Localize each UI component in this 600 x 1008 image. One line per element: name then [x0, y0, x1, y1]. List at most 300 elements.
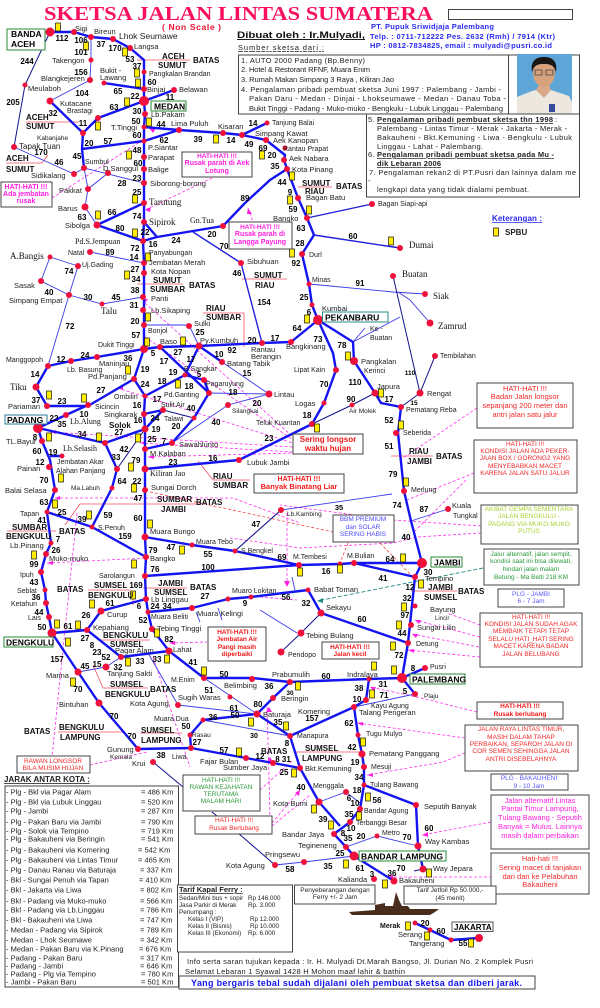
province border labels: SUMUT	[6, 165, 35, 174]
province border labels: BATAS	[193, 56, 220, 65]
town names: Kiliran Jao	[150, 469, 185, 478]
distance numbers: 34	[78, 430, 87, 439]
distance numbers: 30	[133, 107, 142, 116]
distance numbers: 25	[133, 188, 142, 197]
distance numbers: 25	[300, 293, 309, 302]
distance numbers: 46	[233, 269, 242, 278]
distance numbers: 34	[355, 773, 364, 782]
town names: Sibolga	[65, 221, 91, 230]
town names: Bayung	[430, 605, 455, 614]
panel: distance table: = 786 Km	[140, 906, 172, 914]
town names: Siborong-borong	[150, 179, 206, 188]
distance numbers: 35	[324, 862, 333, 871]
panel: distance table: = 566 Km	[140, 896, 172, 906]
town names: Mariapura	[297, 733, 329, 740]
town names: Tempino	[425, 574, 453, 583]
distance numbers: 27	[81, 634, 90, 643]
town names: Tanjung Sakti	[107, 669, 152, 678]
callout: Langga Payung: Rusak parah di	[235, 231, 285, 238]
panel: sources	[238, 55, 580, 114]
town names: Krui	[132, 759, 146, 768]
town names: Lb.Kambing	[287, 511, 322, 518]
province border labels: BENGKULU	[103, 631, 149, 640]
province border labels: SUMSEL	[110, 680, 143, 689]
province border labels: ACEH	[26, 113, 49, 122]
panel: ferry crossing time	[294, 885, 375, 904]
panel: distance table: - Padang - Pakan Baru	[6, 954, 82, 962]
callout: badan jalan longsor	[477, 383, 573, 428]
distance numbers: 106	[74, 36, 88, 45]
panel: personal experience: lengkapi data yang tidak dialami pembuat.	[377, 185, 529, 194]
callout: jalan kecil: HATI-HATI !!!	[330, 644, 370, 651]
town names: Lb.Alung	[70, 417, 101, 426]
town names: Pangkalan Brandan	[149, 71, 211, 78]
town names: Beringin	[281, 694, 309, 703]
town names: Talawi	[164, 416, 184, 423]
town names: Kota Pinang	[292, 165, 333, 174]
town names: Pangkalan	[361, 357, 396, 366]
distance numbers: 97	[401, 611, 410, 620]
town names: Alahan Panjang	[56, 468, 106, 475]
town names: Minas	[312, 277, 331, 284]
distance numbers: 57	[132, 331, 141, 340]
distance numbers: 41	[379, 574, 388, 583]
distance numbers: 15	[93, 660, 102, 669]
distance numbers: 76	[151, 565, 160, 574]
panel: distance table: - Padang - Plg via Tempino	[6, 970, 96, 978]
distance numbers: 58	[286, 865, 295, 874]
distance numbers: 19	[49, 448, 58, 457]
medium roads	[193, 204, 400, 343]
town names: Lb Linggau	[151, 595, 188, 604]
distance numbers: 47	[252, 520, 261, 529]
distance numbers: 49	[245, 140, 254, 149]
callout: Air Pangi bridge: Jembatan Air	[217, 636, 258, 643]
distance numbers: 30	[286, 690, 294, 697]
town names: Pusri	[430, 664, 446, 671]
distance numbers: 24	[141, 380, 150, 389]
callout: rawan longsor: BILA MUSIM HUJAN	[23, 765, 84, 772]
town names: Sibuhuan	[247, 257, 279, 266]
town names: Bonjol	[148, 328, 168, 335]
panel: personal experience: Linggau - Lahat - Palembang.	[377, 142, 483, 151]
callout: jalan belubang: MEMBAIK TETAPI TETAP	[493, 628, 569, 635]
panel: ferry tariff: Rp 146.000	[248, 895, 281, 902]
callout: lintas timur: MASIH DALAM TAHAP	[487, 734, 555, 741]
distance numbers: 35	[345, 810, 354, 819]
callout: akibat gempa: PUTUS	[518, 528, 541, 535]
distance numbers: 70	[128, 732, 137, 741]
city label: Banda Aceh: BANDA	[11, 29, 42, 39]
distance numbers: 70	[320, 380, 329, 389]
town names: Logas	[295, 399, 316, 408]
town names: Sidikalang	[31, 171, 66, 180]
distance numbers: 28	[296, 239, 305, 248]
town names: Bandar Jaya	[282, 830, 325, 839]
callout: binatang liar: Banyak Binatang Liar	[261, 482, 337, 491]
teal alternative-route arrow	[317, 568, 483, 603]
town names: Durl	[309, 252, 322, 259]
distance numbers: 44	[157, 120, 166, 129]
panel: ferry tariff: Kelas III (Ekonomi)	[188, 930, 241, 937]
town names: Bintuhan	[59, 700, 89, 709]
distance numbers: 82	[165, 635, 174, 644]
distance numbers: 6	[137, 602, 142, 611]
town names: Batang Tabik	[227, 359, 270, 368]
red dashed leaders	[150, 492, 413, 577]
distance numbers: 35	[335, 503, 343, 512]
distance numbers: 101	[74, 48, 88, 57]
province border lines	[6, 60, 457, 752]
distance numbers: 71	[380, 691, 389, 700]
distance numbers: 79	[149, 546, 158, 555]
callout: Air Pangi bridge: Pangi masih	[218, 644, 256, 651]
distance numbers: 20	[421, 919, 430, 928]
province border labels: BATAS	[436, 452, 463, 461]
town names: Bagan Siapi-api	[378, 201, 428, 208]
town names: Baso	[160, 337, 177, 346]
town names: Fajar Bulan	[200, 757, 238, 766]
province border labels: RIAU	[305, 187, 325, 196]
distance numbers: 43	[30, 578, 39, 587]
distance numbers: 40	[297, 783, 306, 792]
distance numbers: 157	[50, 655, 64, 664]
callout: BBM habis: dan SOLAR	[346, 524, 381, 531]
town names: Dumai	[409, 240, 434, 250]
distance numbers: 16	[134, 416, 143, 425]
distance numbers: 70	[220, 242, 229, 251]
callout: rusak berlubang south: Rusak Berlubang	[209, 825, 259, 832]
distance numbers: 46	[55, 158, 64, 167]
province border labels: RIAU	[206, 304, 226, 313]
callout: Langga Payung: HATI-HATI !!!	[240, 224, 280, 231]
callout: jembatan rusak	[1, 182, 52, 207]
town names: Py.Kumbuh	[200, 336, 238, 345]
distance numbers: 27	[201, 592, 210, 601]
distance numbers: 14	[130, 253, 139, 262]
author contact: HP : 0812-7834825, email : mulyadi@pusri.co.id	[370, 41, 552, 50]
callout: badan jalan longsor: HATI-HATI !!!	[503, 384, 547, 393]
callout: jembatan rusak: Ada jembatan	[3, 191, 49, 198]
province border labels: SUMSEL	[154, 588, 187, 597]
distance numbers: 22	[133, 477, 142, 486]
town names: Talang Pengeran	[359, 708, 416, 717]
town names: Pariaman	[8, 402, 40, 411]
town names: Aek Nabara	[289, 154, 329, 163]
panel: distance table: - Plg - Bakauheni via Beringin	[6, 834, 105, 844]
town names: Kalianda	[338, 875, 368, 884]
distance numbers: 12	[406, 583, 415, 592]
panel: personal experience	[366, 114, 580, 197]
panel: personal experience: 6.	[368, 150, 374, 159]
town names: Kemala	[110, 754, 132, 761]
town names: Tanjung Balai	[272, 120, 314, 127]
distance numbers: 34	[132, 275, 141, 284]
distance numbers: 63	[40, 498, 49, 507]
distance numbers: 37	[32, 396, 41, 405]
province border labels	[6, 52, 485, 763]
town names: Way Kambas	[425, 837, 470, 846]
distance numbers: 66	[108, 208, 117, 217]
distance numbers: 23	[93, 648, 102, 657]
town names: P.Siantar	[148, 143, 178, 152]
town names: Rengat	[427, 389, 452, 398]
panel: distance table: - Jambi - Pakan Baru	[6, 978, 76, 986]
distance numbers: 10	[351, 799, 360, 808]
callout: jalan belubang: MACET KARENA BADAN	[493, 643, 569, 650]
town names: Lb.Selasih	[63, 444, 97, 453]
town names: Plaju	[424, 693, 439, 700]
town names: A.Bangis	[10, 251, 44, 261]
town names: Manna	[46, 671, 70, 680]
town names: Babat Toman	[314, 585, 358, 594]
callout: Plg-Jambi time	[498, 589, 564, 607]
town names: Bkt.Kemuning	[305, 764, 352, 773]
town names: Sipirok	[149, 217, 176, 227]
distance numbers: 5	[197, 370, 202, 379]
city label: Bandar Lampung: BANDAR LAMPUNG	[361, 852, 443, 862]
distance numbers: 36	[265, 682, 274, 691]
distance numbers: 72	[131, 244, 140, 253]
callout: rusak berlubang south	[195, 816, 272, 834]
distance numbers: 38	[355, 684, 364, 693]
town names: Tembilahan	[440, 353, 476, 360]
distance numbers: 78	[338, 341, 347, 350]
province border labels: SUMBAR	[213, 481, 248, 490]
town names: Meulaboh	[28, 84, 61, 93]
town names: B.Sangkar	[184, 366, 217, 373]
town names: Zamrud	[438, 321, 467, 331]
town names: Tarutung	[149, 197, 182, 207]
distance numbers: 92	[292, 259, 301, 268]
callout: akibat gempa	[481, 505, 578, 544]
callout: lintas timur: ANTRI DISEBELAHNYA	[486, 756, 557, 763]
panel: distance table: = 501 Km	[141, 978, 173, 986]
province border labels: BATAS	[196, 498, 223, 507]
panel: distance table: = 342 Km	[140, 936, 172, 944]
province border labels: SUMUT	[153, 276, 182, 285]
panel: distance table: - Bkl - Bakauheni via Liwa	[6, 916, 93, 924]
distance numbers: 11	[166, 93, 175, 102]
town names: Kisaran	[218, 122, 243, 131]
callout: jalan belubang: HATI-HATI !!!	[512, 614, 550, 621]
panel: distance table: = 287 Km	[141, 806, 173, 816]
panel: distance table: = 541 Km	[141, 834, 173, 844]
town names: Indralaya	[347, 670, 379, 679]
distance numbers: 24	[151, 602, 160, 611]
subtitle: non scale: ( Non Scale )	[162, 22, 221, 32]
distance numbers: 14	[31, 370, 40, 379]
distance numbers: 11	[79, 119, 88, 128]
town names: Merak	[380, 923, 400, 930]
callout: badan jalan longsor: Badan Jalan longsor	[491, 392, 560, 401]
town names: Muara Bungo	[150, 527, 195, 536]
distance numbers: 154	[257, 298, 271, 307]
town names: Pd.Panjang	[88, 372, 127, 381]
distance numbers: 33	[153, 655, 162, 664]
distance numbers: 14	[227, 136, 236, 145]
distance numbers: 31	[130, 301, 139, 310]
town names: Lahat	[173, 645, 193, 654]
callout: jalur alternatif: hindari jalan malam	[503, 566, 559, 573]
distance numbers: 62	[160, 136, 169, 145]
town names: Sumbul	[85, 159, 109, 166]
town names: Bangkinang	[286, 342, 326, 351]
province border labels: SUMUT	[26, 122, 55, 131]
province border labels: SUMBAR	[157, 495, 192, 504]
distance numbers: 60	[134, 514, 143, 523]
town names: Belawan	[179, 85, 208, 94]
distance numbers: 5	[151, 349, 156, 358]
town names: Silangkai	[232, 408, 258, 415]
distance numbers: 17	[271, 334, 280, 343]
distance numbers: 61	[356, 864, 365, 873]
distance numbers: 72	[66, 322, 75, 331]
distance numbers: 36	[388, 869, 397, 878]
town names: Terbanggi Besar	[356, 820, 408, 827]
panel: personal experience: 7. Pengalaman rekan2 di PT.Pusri dan lainnya dalam me	[369, 168, 576, 177]
distance numbers: 64	[118, 477, 127, 486]
panel: personal experience: dik Lebaran 2006	[377, 159, 441, 168]
province border labels: SUMUT	[254, 271, 283, 280]
distance numbers: 30	[424, 568, 433, 577]
distance numbers: 74	[133, 212, 142, 221]
callout: rusak berlubang south: HATI-HATI !!!	[215, 817, 253, 824]
panel: jetfoil tariff	[404, 886, 496, 904]
distance numbers: 44	[278, 178, 287, 187]
panel: distance table: = 410 Km	[139, 876, 171, 884]
callout: jalur alternatif: kondisi saat ini bisa dilewati,	[490, 558, 572, 565]
town names: Pagaruyung	[206, 381, 244, 388]
callout: rawan longsor	[17, 756, 90, 773]
callout: jalan belubang: KONDISI JALAN SUDAH AGAK	[485, 621, 578, 628]
panel: distance table: = 646 Km	[140, 962, 172, 970]
bottom banner: Yang bergaris tebal sudah dijalani oleh pembuat sketsa dan diberi jarak.	[191, 978, 522, 988]
panel: sources: 3. Rumah Makan Simpang 3 Raya , Kiliran Jao	[241, 75, 394, 84]
distance numbers: 42	[120, 445, 129, 454]
town names: Tiku	[10, 382, 27, 392]
city label: Medan: MEDAN	[154, 102, 185, 112]
distance numbers: 27	[193, 738, 202, 747]
callout: BBM habis	[333, 515, 394, 542]
distance numbers: 28	[118, 179, 127, 188]
panel: distance table: = 747 Km	[140, 916, 172, 924]
town names: Jembatan Akar	[57, 459, 104, 466]
callout: jalan belubang: JALAN BELUBANG	[502, 651, 560, 658]
title: SKETSA JALAN LINTAS SUMATERA	[44, 3, 434, 25]
distance numbers: 72	[395, 651, 404, 660]
distance numbers: 18	[158, 377, 167, 386]
empty header box	[448, 10, 572, 20]
distance numbers: 52	[139, 616, 148, 625]
distance numbers: 52	[102, 653, 111, 662]
callout: jalur alternatif	[484, 549, 579, 585]
town names: Bakauheni	[399, 876, 435, 885]
town names: Menggala	[313, 783, 344, 790]
town names: Parapat	[148, 153, 175, 162]
province border labels: RIAU	[409, 447, 429, 456]
distance numbers: 39	[319, 815, 328, 824]
distance numbers: 8	[90, 641, 95, 650]
distance numbers: 170	[34, 148, 48, 157]
panel: ferry tariff: Jasa Parkir di Merak	[179, 902, 237, 909]
callout: Plg-Jambi time: 6 - 7 Jam	[517, 598, 545, 605]
author contact: PT. Pupuk Sriwidjaja Palembang	[371, 22, 494, 31]
distance numbers: 59	[289, 205, 298, 214]
town names: Pringsewu	[265, 850, 300, 859]
province border labels: JAMBI	[407, 457, 432, 466]
distance numbers: 52	[385, 416, 394, 425]
author heading: Dibuat oleh : Ir.Mulyadi,	[237, 30, 365, 41]
distance numbers: 3	[370, 870, 375, 879]
distance numbers: 23	[133, 174, 142, 183]
town names: Tapan	[20, 511, 39, 518]
distance numbers: 19	[169, 368, 178, 377]
distance numbers: 40	[45, 288, 54, 297]
town names: Pd.Ganting	[164, 392, 199, 399]
town names: Natal	[68, 250, 85, 257]
distance numbers: 35	[271, 162, 280, 171]
panel: ferry tariff: Rp 10.000	[250, 923, 280, 930]
distance numbers: 8	[411, 664, 416, 673]
distance numbers: 50	[38, 623, 47, 632]
distance numbers: 20	[172, 422, 181, 431]
town names: M.Enim	[171, 677, 195, 684]
panel: distance table: - Plg - Danau Ranau via Baturaja	[6, 866, 117, 874]
panel: distance table: = 790 Km	[141, 818, 173, 826]
panel: ferry crossing time: Ferry +/- 2 Jam	[313, 894, 357, 901]
distance numbers: 57	[104, 137, 113, 146]
panel: jetfoil tariff: (45 menit)	[435, 895, 465, 902]
town names: Bukit -	[100, 66, 122, 75]
distance numbers: 62	[345, 719, 354, 728]
distance numbers: 19	[141, 365, 150, 374]
panel: ferry tariff: Rp. 3.000	[248, 902, 276, 909]
panel: ferry tariff: Tarif Kapal Ferry :	[179, 885, 243, 894]
distance numbers: 10	[80, 410, 89, 419]
town names: Lb. Basung	[67, 367, 103, 374]
town names: Bagan Batu	[306, 193, 345, 202]
town names: Merlung	[411, 487, 436, 494]
callout: lintas timur: JALAN RAYA LINTAS TIMUR,	[478, 726, 564, 733]
town names: Lais	[28, 615, 41, 622]
distance numbers: 18	[353, 786, 362, 795]
distance numbers: 27	[131, 265, 140, 274]
province border labels: SUMSEL	[141, 726, 174, 735]
distance numbers: 7	[56, 535, 61, 544]
distance numbers: 39	[78, 515, 87, 524]
town names: Lima Puluh	[171, 119, 209, 128]
town names: S.Bengkel	[241, 548, 273, 555]
province border labels: SUMSEL	[94, 581, 127, 590]
panel: distance table: = 486 Km	[141, 788, 173, 796]
distance numbers: 80	[254, 700, 263, 709]
province border labels: BATAS	[59, 527, 86, 536]
town names: Muara Dua	[154, 716, 189, 723]
town names: Blangkejeren	[41, 74, 85, 83]
town names: T.Tinggi	[111, 123, 137, 132]
town names: Bandar Agung	[364, 808, 408, 815]
callout: rawan longsor: RAWAN LONGSOR	[24, 758, 82, 765]
town names: Mesuji	[371, 764, 392, 771]
town names: Kerinci	[364, 368, 386, 375]
callout: akibat gempa: JALAN BENGKULU -	[498, 513, 560, 520]
panel: ferry tariff: Rp 12.000	[250, 916, 280, 923]
town names: Buatan	[402, 269, 428, 279]
province border labels: SUMUT	[302, 179, 331, 188]
panel: distance table: = 780 Km	[141, 970, 173, 978]
callout: macet tanjakan: Hati-hati !!!	[522, 854, 558, 863]
